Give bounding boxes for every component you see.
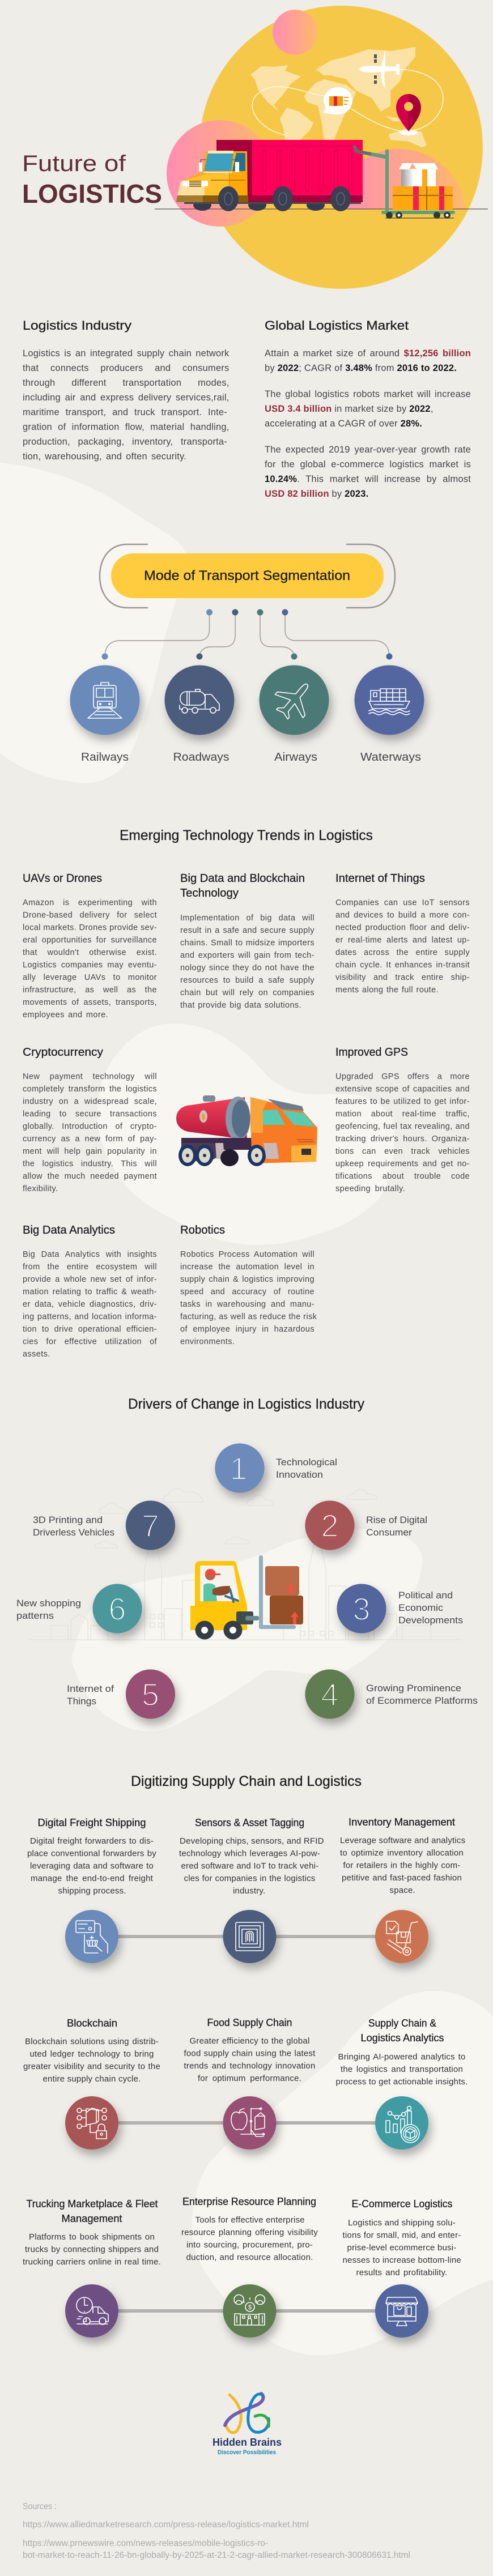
text: digital freight shipping: shipping process. xyxy=(58,1886,126,1896)
text: internet of things: ments along the full route. xyxy=(335,986,439,995)
text: blockchain xyxy=(23,2037,160,2084)
text: blockchain: entire supply chain cycle. xyxy=(43,2074,141,2084)
tanker truck illustration xyxy=(176,1095,317,1166)
text: uavs or drones: Amazon is experimenting with xyxy=(23,898,157,907)
text: global logistics market: for the global e-commerce logistics market is xyxy=(265,459,471,469)
text: uavs or drones: Logistics companies may eventu- xyxy=(23,961,157,970)
text: uavs or drones: infrastructure, as well as the xyxy=(23,986,157,995)
connectors xyxy=(105,612,389,656)
text: digital freight shipping xyxy=(27,1836,156,1896)
heading: robotics: Robotics xyxy=(180,1224,225,1236)
brackets xyxy=(100,544,395,608)
text: cryptocurrency: currency as a new form of pay- xyxy=(23,1135,157,1144)
text: sensors and asset tagging: technology which leverages AI-pow- xyxy=(179,1849,320,1858)
text: enterprise resource planning: duction, and resource allocation. xyxy=(186,2253,313,2262)
driver 1: Technological xyxy=(276,1457,337,1468)
text: food supply chain: food supply chain using the latest xyxy=(184,2049,315,2058)
driver 6: New shopping xyxy=(16,1598,81,1609)
text: uavs or drones: that wouldn't otherwise exist. xyxy=(23,948,157,957)
text: logistics industry: including air and express delivery services,rail, xyxy=(23,392,229,402)
text: big data and blockchain: Implementation of big data will xyxy=(180,914,314,923)
text: global logistics market: The global logistics robots market will increase xyxy=(265,389,471,399)
text: enterprise resource planning xyxy=(181,2215,318,2262)
text: improved gps: extensive scope of capacities and xyxy=(335,1085,470,1094)
heading: improved gps: Improved GPS xyxy=(335,1046,408,1059)
driver 3: 3 xyxy=(352,1591,371,1627)
driver 7: 3D Printing and xyxy=(33,1515,103,1525)
text: cryptocurrency: industry on a widespread scale, xyxy=(23,1097,157,1106)
text: enterprise resource planning: into sourcing, procurement, pro- xyxy=(186,2240,313,2250)
card headings: Sensors & Asset Tagging xyxy=(195,1817,304,1828)
text: internet of things: Companies can use IoT sensors xyxy=(335,898,470,907)
driver 4: 4 xyxy=(321,1677,339,1712)
driver 1 xyxy=(215,1443,337,1493)
text: sensors and asset tagging: industry. xyxy=(233,1886,265,1896)
title xyxy=(22,151,162,208)
ground line xyxy=(155,208,488,210)
icon: inventory management xyxy=(375,1910,428,1963)
sources xyxy=(23,2502,410,2560)
card headings: Enterprise Resource Planning xyxy=(182,2196,316,2207)
text: cryptocurrency xyxy=(23,1072,157,1193)
text: big data analytics: ing patterns, and location informa- xyxy=(23,1312,157,1321)
text: inventory management: for retailers in the highly com- xyxy=(343,1861,460,1870)
text: improved gps: tions can even track vehicles xyxy=(335,1147,470,1156)
text: digital freight shipping: place conventional forwarders by xyxy=(27,1849,156,1858)
icon: enterprise resource planning xyxy=(223,2284,277,2338)
text: big data analytics: tion to drive operational efficien- xyxy=(23,1325,157,1334)
icon: trucking marketplace xyxy=(65,2284,118,2338)
parcel trolley xyxy=(354,146,455,219)
text: improved gps: geofencing, fuel tax revealing, and xyxy=(335,1122,470,1131)
text: digital freight shipping: manage the end-to-end freight xyxy=(31,1874,153,1883)
text: global logistics market: USD 82 billion by 2023. xyxy=(265,488,368,498)
text: cryptocurrency: flexibility. xyxy=(23,1184,58,1193)
driver 2: Consumer xyxy=(366,1527,412,1538)
heading: digitizing supply chain: Digitizing Supply Chain and Logistics xyxy=(131,1773,362,1789)
sources: https://www.alliedmarketresearch.com/press-release/logistics-market.html xyxy=(23,2520,309,2530)
hidden brains logo xyxy=(212,2394,282,2456)
card headings: Inventory Management xyxy=(348,1816,455,1828)
text: improved gps: speeding brutally. xyxy=(335,1184,405,1193)
driver 4 xyxy=(305,1669,478,1719)
heading: big data and blockchain xyxy=(180,872,305,899)
text: inventory management: Leverage software and analytics xyxy=(340,1836,465,1845)
text: internet of things: chain cycle. It enhances in-transit xyxy=(335,961,470,970)
text: big data analytics: er data, vehicle diagnostics, driv- xyxy=(23,1300,157,1309)
pink right blob xyxy=(333,149,466,208)
text: robotics: speed and accuracy of routine xyxy=(180,1287,314,1296)
card headings: Digital Freight Shipping xyxy=(37,1817,146,1828)
heading: uavs: UAVs or Drones xyxy=(23,872,102,885)
card headings xyxy=(26,1816,455,2224)
forklift illustration xyxy=(190,1555,303,1639)
icon: enterprise resource planning: $ xyxy=(248,2304,252,2311)
text: supply chain analytics xyxy=(335,2052,468,2087)
text: logistics industry: through different transportation modes, xyxy=(23,377,229,387)
heading: cryptocurrency: Cryptocurrency xyxy=(23,1046,103,1059)
hero illustration xyxy=(155,6,488,289)
card headings: E-Commerce Logistics xyxy=(351,2198,452,2210)
text: robotics: Robotics Process Automation will xyxy=(180,1250,314,1259)
heading: internet of things: Internet of Things xyxy=(335,872,425,885)
text: logistics industry: that connects producers and consumers xyxy=(23,362,229,373)
driver 5: Things xyxy=(67,1696,96,1707)
text: internet of things: visibility and track entire ship- xyxy=(335,973,470,982)
heading: big data and blockchain: Big Data and Blockchain xyxy=(180,872,305,885)
location pin xyxy=(396,94,421,135)
icon: supply chain analytics xyxy=(375,2096,428,2149)
text: uavs or drones xyxy=(23,898,157,1020)
sources: Sources : xyxy=(23,2502,57,2511)
text: global logistics market: by 2022; CAGR of 3.48% from 2016 to 2022. xyxy=(265,362,457,373)
text: food supply chain: for optimum performance. xyxy=(198,2074,301,2083)
text: blockchain: Blockchain solutions using distrib- xyxy=(25,2037,159,2046)
text: global logistics market: USD 3.4 billion in market size by 2022, xyxy=(265,403,434,413)
text: cryptocurrency: globally. Introduction of crypto- xyxy=(23,1122,157,1131)
text: big data analytics: Big Data Analytics with insights xyxy=(23,1250,157,1259)
text: big data analytics: assets. xyxy=(23,1350,50,1359)
label: roadways: Roadways xyxy=(173,751,229,764)
text: improved gps: tifications about trouble code xyxy=(335,1172,470,1181)
faint city backdrop xyxy=(28,1489,462,1640)
text: global logistics market xyxy=(265,348,471,498)
driver 5: Internet of xyxy=(67,1683,114,1694)
text: sensors and asset tagging: Developing chips, sensors, and RFID xyxy=(180,1836,324,1846)
label: waterways: Waterways xyxy=(360,751,421,764)
text: big data and blockchain xyxy=(180,914,314,1010)
title: LOGISTICS xyxy=(22,179,162,208)
text: big data and blockchain: resources to build a safe supply xyxy=(180,976,314,985)
text: big data analytics xyxy=(23,1250,157,1359)
text: improved gps: tracking driver's hours. Organiza- xyxy=(335,1135,470,1144)
connector bars xyxy=(92,1935,402,2313)
card headings: Logistics Analytics xyxy=(360,2032,444,2044)
text: food supply chain: Greater efficiency to the global xyxy=(189,2036,309,2046)
text: robotics: of employee injury in hazardous xyxy=(180,1325,314,1334)
text: sensors and asset tagging: cles for companies in the logistics xyxy=(184,1874,315,1883)
text: e-commerce logistics: Logistics and shipping solu- xyxy=(348,2218,456,2228)
pill heading: Mode of Transport Segmentation xyxy=(144,568,350,583)
text: inventory management xyxy=(340,1836,465,1895)
text: cryptocurrency: leading to secure transactions xyxy=(23,1110,157,1119)
text: cryptocurrency: allow the much needed payment xyxy=(23,1172,157,1181)
pill heading xyxy=(111,553,384,598)
text: big data and blockchain: nology since they do not have the xyxy=(180,963,314,973)
text: internet of things xyxy=(335,898,470,995)
text: blockchain: uted ledger technology to bring xyxy=(29,2049,154,2059)
label: railways: Railways xyxy=(81,751,129,764)
text: supply chain analytics: Bringing AI-powered analytics to xyxy=(338,2052,466,2062)
icon: railways xyxy=(70,665,139,735)
text: robotics: tasks in warehousing and manu- xyxy=(180,1300,314,1309)
route line xyxy=(252,69,443,135)
driver 1: Innovation xyxy=(276,1469,323,1480)
text: big data analytics: mation relating to traffic & weath- xyxy=(23,1287,157,1296)
driver 4: Growing Prominence xyxy=(366,1683,461,1694)
hidden brains logo: Discover Possibilities xyxy=(218,2449,276,2456)
heading: big data analytics: Big Data Analytics xyxy=(23,1224,115,1236)
icon: food supply chain xyxy=(223,2096,277,2149)
driver 6: 6 xyxy=(108,1591,126,1627)
driver 7 xyxy=(33,1500,175,1550)
text: logistics industry: tion, warehousing, and often security. xyxy=(23,451,186,461)
truck xyxy=(176,140,363,211)
text: logistics industry: maritime transport, and truck transport. Inte- xyxy=(23,407,227,417)
text: cryptocurrency: completely transform the logistics xyxy=(23,1085,157,1094)
text: trucking marketplace: trucks by connecting shippers and xyxy=(25,2245,159,2254)
text: digital freight shipping: leveraging data and software to xyxy=(30,1861,154,1871)
text: inventory management: space. xyxy=(390,1886,415,1895)
big yellow circle xyxy=(199,6,483,289)
text: trucking marketplace: trucking carriers online in real time. xyxy=(23,2257,161,2267)
text: blockchain: greater visibility and security to the xyxy=(23,2062,160,2071)
card headings: Trucking Marketplace & Fleet xyxy=(26,2198,158,2210)
text: e-commerce logistics: tions for small, mid, and enter- xyxy=(342,2230,461,2240)
text: logistics industry: production, packaging, inventory, transporta- xyxy=(23,436,227,446)
text: internet of things: dates across the entire supply xyxy=(335,948,470,957)
icon: digital freight shipping xyxy=(65,1910,118,1963)
driver 5: 5 xyxy=(142,1677,159,1712)
sources: https://www.prnewswire.com/news-releases/mobile-logistics-ro- xyxy=(23,2539,268,2548)
icon: waterways xyxy=(355,665,424,735)
connector dots xyxy=(102,609,392,659)
text: logistics industry xyxy=(23,348,229,461)
text: cryptocurrency: New payment technology will xyxy=(23,1072,157,1081)
transport segmentation diagram xyxy=(70,544,424,764)
text: uavs or drones: Drone-based delivery for select xyxy=(23,911,157,920)
pink left blob xyxy=(167,120,273,227)
world map xyxy=(250,47,427,147)
text: uavs or drones: employees and more. xyxy=(23,1010,108,1020)
text: e-commerce logistics: nesses to increase bottom-line xyxy=(342,2255,461,2265)
text: enterprise resource planning: Tools for effective enterprise xyxy=(195,2215,305,2225)
sources: bot-market-to-reach-11-26-bn-globally-by-2025-at-21-2-cagr-allied-market-research-300806631.html xyxy=(23,2551,410,2560)
driver 2 xyxy=(305,1500,427,1550)
icon: sensors and asset tagging xyxy=(223,1910,277,1963)
text: uavs or drones: movements of assets, transports, xyxy=(23,998,157,1007)
text: big data and blockchain: that provide big data solutions. xyxy=(180,1001,301,1010)
driver 6: patterns xyxy=(16,1610,54,1621)
text: e-commerce logistics xyxy=(342,2218,461,2278)
heading: global logistics market: Global Logistics Market xyxy=(265,318,409,332)
text: food supply chain xyxy=(184,2036,315,2083)
hidden brains logo: Hidden Brains xyxy=(212,2437,282,2448)
icon: airways xyxy=(260,665,329,735)
parcel bubble xyxy=(322,87,352,114)
text: improved gps: Upgraded GPS offers a more xyxy=(335,1072,470,1081)
text: cryptocurrency: ment will help gain popularity in xyxy=(23,1147,157,1156)
text: inventory management: to optimize inventory allocation xyxy=(340,1848,464,1858)
text: improved gps: features to be utilized to get infor- xyxy=(335,1097,470,1106)
text: robotics: facturing, as well as reduce the risk xyxy=(180,1312,317,1321)
text: global logistics market: The expected 2019 year-over-year growth rate xyxy=(265,444,471,454)
driver 2: 2 xyxy=(321,1508,339,1543)
text: big data analytics: from the entire ecosystem will xyxy=(23,1263,157,1272)
heading: big data and blockchain: Technology xyxy=(180,887,239,899)
text: uavs or drones: local markets. Drones provide sev- xyxy=(23,923,157,932)
text: trucking marketplace: Platforms to book shipments on xyxy=(29,2232,155,2242)
text: global logistics market: 10.24%. This market will increase by almost xyxy=(265,474,471,484)
text: big data and blockchain: chains. Small to midsize importers xyxy=(180,939,314,948)
text: big data and blockchain: chain but will rely on companies xyxy=(180,988,314,997)
text: supply chain analytics: the logistics and transportation xyxy=(341,2065,463,2074)
text: big data analytics: provide a whole new set of infor- xyxy=(23,1275,157,1284)
text: big data and blockchain: result in a safe and secure supply xyxy=(180,926,314,935)
label: airways: Airways xyxy=(274,751,317,764)
driver 7: Driverless Vehicles xyxy=(33,1527,114,1538)
text: logistics industry: Logistics is an integrated supply chain network xyxy=(23,348,229,358)
text: food supply chain: trends and technology innovation xyxy=(184,2061,315,2071)
text: enterprise resource planning: resource planning offering visibility xyxy=(181,2228,318,2237)
card headings: Blockchain xyxy=(67,2018,117,2029)
text: sensors and asset tagging: ered software and IoT to track vehi- xyxy=(181,1861,318,1871)
driver 3: Political and xyxy=(398,1590,453,1601)
text: e-commerce logistics: results and profitability. xyxy=(356,2268,448,2278)
text: robotics: environments. xyxy=(180,1337,235,1346)
driver 5 xyxy=(67,1669,175,1719)
text: sensors and asset tagging xyxy=(179,1836,324,1896)
text: improved gps: mation about real-time traffic, xyxy=(335,1110,470,1119)
icon: blockchain xyxy=(65,2096,118,2149)
text: inventory management: petitive and fast-paced fashion xyxy=(342,1873,462,1883)
text: internet of things: er real-time alerts and latest up- xyxy=(335,936,470,945)
driver 3: Economic xyxy=(398,1602,444,1613)
text: improved gps: upkeep requirements and get no- xyxy=(335,1159,470,1168)
text: global logistics market: accelerating at a CAGR of over 28%. xyxy=(265,418,422,428)
text: robotics: supply chain & logistics improving xyxy=(180,1275,314,1284)
heading: emerging technology trends: Emerging Technology Trends in Logistics xyxy=(120,828,373,843)
text: cryptocurrency: the logistics industry. This will xyxy=(23,1159,157,1168)
driver 3 xyxy=(337,1584,463,1634)
driver 6 xyxy=(16,1584,142,1634)
text: robotics: increase the automation level in xyxy=(180,1263,314,1272)
icon: e-commerce logistics xyxy=(375,2284,428,2338)
airplane xyxy=(359,49,400,89)
background blobs xyxy=(0,463,493,2355)
text: improved gps xyxy=(335,1072,470,1193)
heading: logistics industry: Logistics Industry xyxy=(23,318,131,332)
text: uavs or drones: eral opportunities for surveillance xyxy=(23,936,157,945)
driver 1: 1 xyxy=(230,1451,248,1486)
text: big data analytics: cies for effective utilization of xyxy=(23,1337,157,1346)
driver 7: 7 xyxy=(142,1508,159,1543)
text: big data and blockchain: and exporters will gain from tech- xyxy=(180,951,314,960)
card headings: Food Supply Chain xyxy=(207,2017,292,2028)
text: e-commerce logistics: prise-level ecommerce busi- xyxy=(347,2243,457,2253)
text: digital freight shipping: Digital freight forwarders to dis- xyxy=(30,1836,154,1846)
card headings: Management xyxy=(61,2213,122,2224)
text: internet of things: nected production floor and deliv- xyxy=(335,923,470,932)
card headings: Supply Chain & xyxy=(368,2018,436,2029)
title: Future of xyxy=(22,151,126,176)
text: trucking marketplace xyxy=(23,2232,161,2267)
driver 2: Rise of Digital xyxy=(366,1515,427,1525)
heading: drivers of change: Drivers of Change in Logistics Industry xyxy=(128,1396,364,1412)
text: global logistics market: Attain a market size of around $12,256 billion xyxy=(265,348,471,358)
text: uavs or drones: ally leverage UAVs to monitor xyxy=(23,973,157,982)
text: robotics xyxy=(180,1250,317,1346)
driver 4: of Ecommerce Platforms xyxy=(366,1695,478,1706)
pink top blob xyxy=(273,10,318,55)
text: supply chain analytics: process to get actionable insights. xyxy=(335,2077,468,2087)
text: logistics industry: gration of information flow, material handling, xyxy=(23,421,229,432)
text: internet of things: and devices to build a more con- xyxy=(335,911,470,920)
driver 3: Developments xyxy=(398,1615,463,1626)
icon: roadways xyxy=(164,665,235,735)
